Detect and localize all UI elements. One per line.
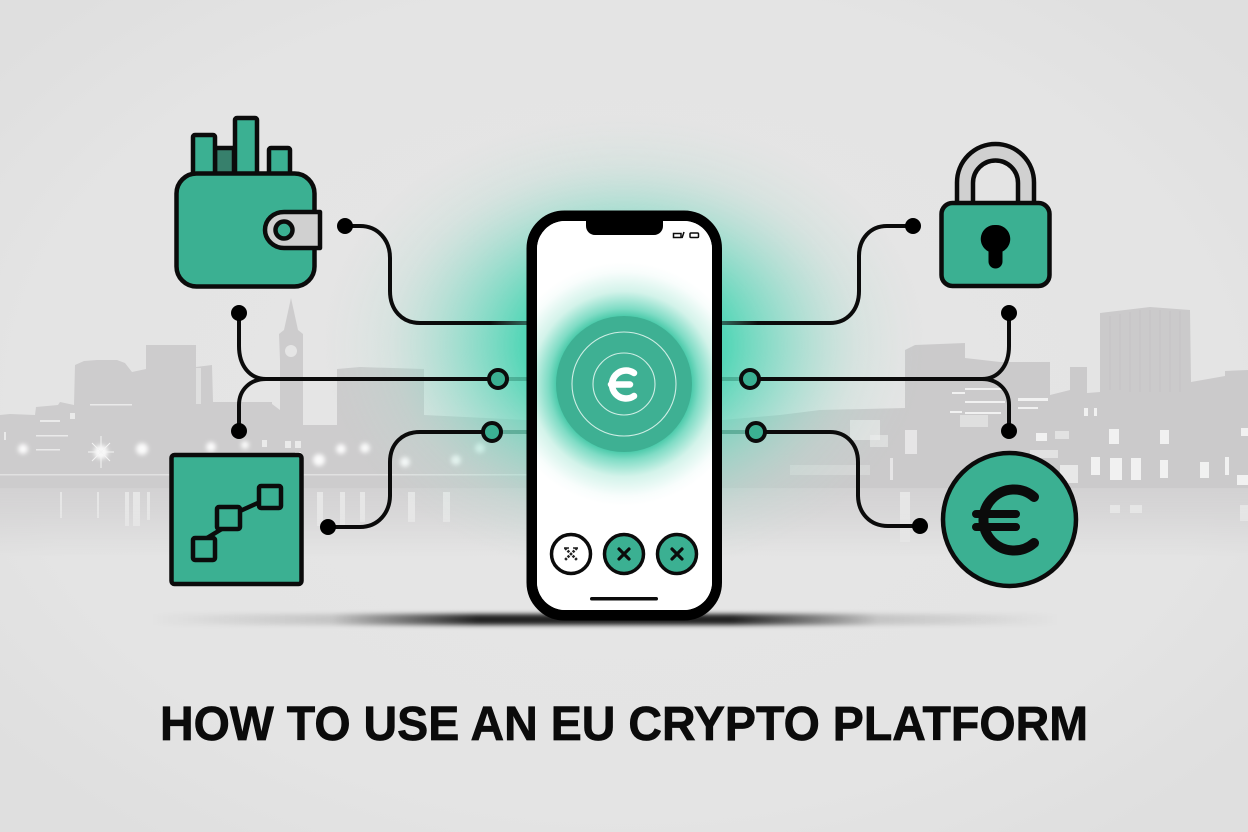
home indicator (590, 597, 658, 600)
smartphone (532, 216, 717, 616)
tall tower shading (1110, 310, 1180, 392)
phone frame (532, 216, 717, 616)
icon: wallet (176, 118, 320, 286)
connector: left junction (231, 305, 527, 439)
keyhole (981, 225, 1010, 268)
connector: wallet to phone (337, 218, 527, 323)
street lights left (18, 441, 485, 467)
city skyline backdrop (0, 298, 1248, 558)
screen glow (537, 221, 712, 610)
padlock shackle (957, 144, 1034, 204)
icon: padlock (942, 144, 1050, 286)
ground shadow under phone (150, 614, 1060, 625)
status icons (674, 232, 698, 238)
padlock body (942, 203, 1050, 286)
water base (0, 490, 1248, 532)
bottom button: close two (658, 534, 696, 574)
bottom button: logo (552, 534, 590, 574)
notch (586, 218, 663, 235)
clock face (285, 345, 297, 357)
connector: right junction (722, 305, 1017, 439)
euro bars (976, 514, 1016, 527)
chart link lines (207, 502, 260, 538)
coin disc (943, 453, 1076, 586)
connector: euro coin to phone (722, 423, 928, 534)
title: HOW TO USE AN EU CRYPTO PLATFORM (160, 698, 1088, 751)
bottom button: close one (604, 534, 644, 574)
lit windows left (0, 368, 527, 476)
skyline right buildings (722, 307, 1248, 495)
connector: chart to phone (320, 423, 527, 535)
wallet chart bars (193, 118, 290, 178)
reflection over water (60, 492, 1248, 531)
wallet button (276, 222, 292, 238)
white euro symbol (611, 370, 634, 398)
chart nodes (193, 486, 281, 560)
green glow behind phone (324, 115, 924, 575)
icon: chart tile (172, 455, 302, 584)
wallet body (176, 174, 314, 286)
icon: euro coin (943, 453, 1076, 586)
tile background (172, 455, 302, 584)
lit windows right (790, 388, 1248, 485)
skyline left buildings (0, 298, 527, 490)
phone screen (537, 221, 712, 610)
star rays (88, 436, 114, 468)
wallet clasp (265, 212, 320, 248)
central euro badge (556, 316, 692, 452)
euro symbol (983, 490, 1034, 550)
connector: lock to phone (722, 218, 921, 323)
